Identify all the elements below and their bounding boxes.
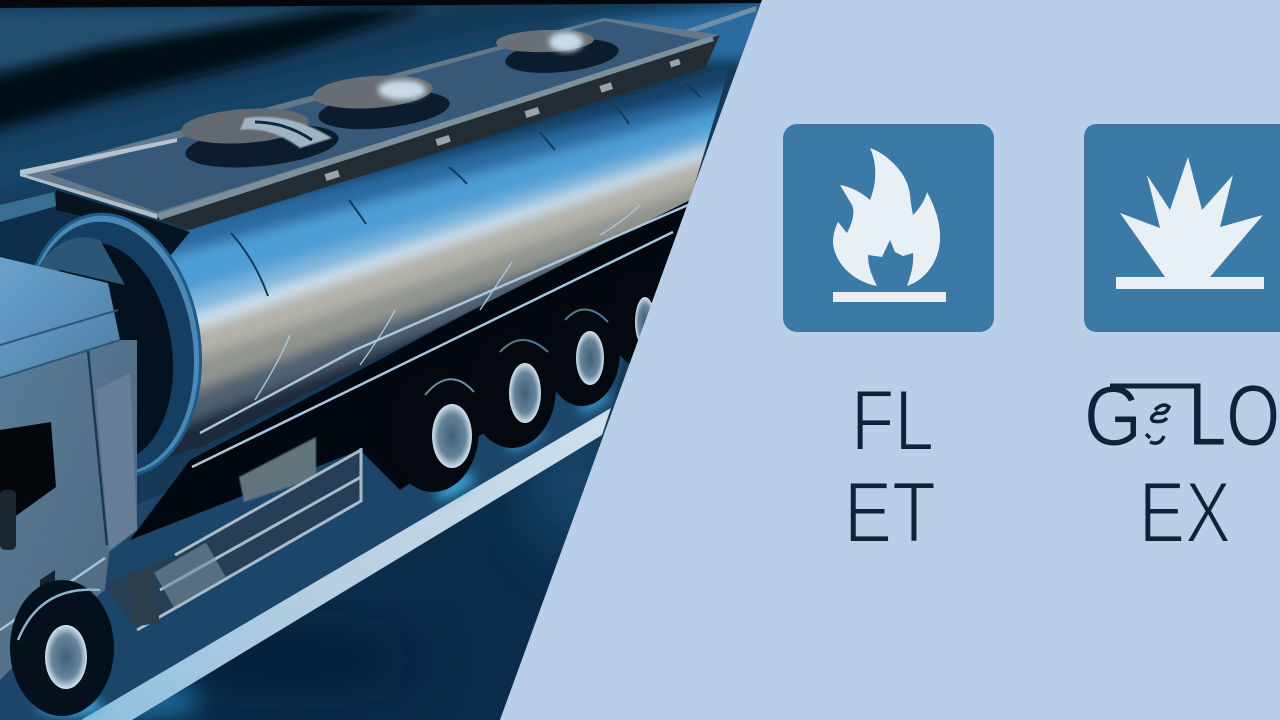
label: ET: ET: [844, 465, 936, 561]
photo: tanker truck on road: [0, 0, 800, 720]
icon box: [1084, 124, 1280, 332]
hazard card: explosive: [1084, 124, 1280, 463]
hazard card: flammable: [783, 124, 994, 469]
label: EX: EX: [1139, 465, 1231, 561]
front wheel: [10, 580, 114, 716]
wheels: [410, 280, 660, 492]
label: FL: FL: [851, 373, 934, 469]
top walkway: [20, 18, 720, 230]
lower road: [132, 434, 604, 720]
undercarriage: [130, 190, 700, 540]
icon: explosion: [1116, 157, 1264, 289]
road surface: [0, 356, 624, 720]
tank barrel: [168, 68, 729, 458]
wheel glow: [38, 389, 612, 715]
gray panel behind step rack: [239, 437, 316, 502]
label: G: G: [1084, 369, 1142, 463]
tank end cap ring: [34, 190, 202, 476]
light blue panel: [500, 0, 1280, 720]
chassis rails: [192, 205, 688, 467]
icon box: [783, 124, 994, 332]
truck cab: [0, 257, 137, 680]
label squiggle and top bar: [1110, 386, 1198, 443]
icon: flame: [833, 148, 940, 286]
side step rack: [103, 448, 361, 630]
hatch domes: [180, 28, 620, 174]
icon: base line: [833, 292, 946, 302]
road stripe: [81, 408, 611, 720]
dark streaked background: [0, 0, 800, 720]
